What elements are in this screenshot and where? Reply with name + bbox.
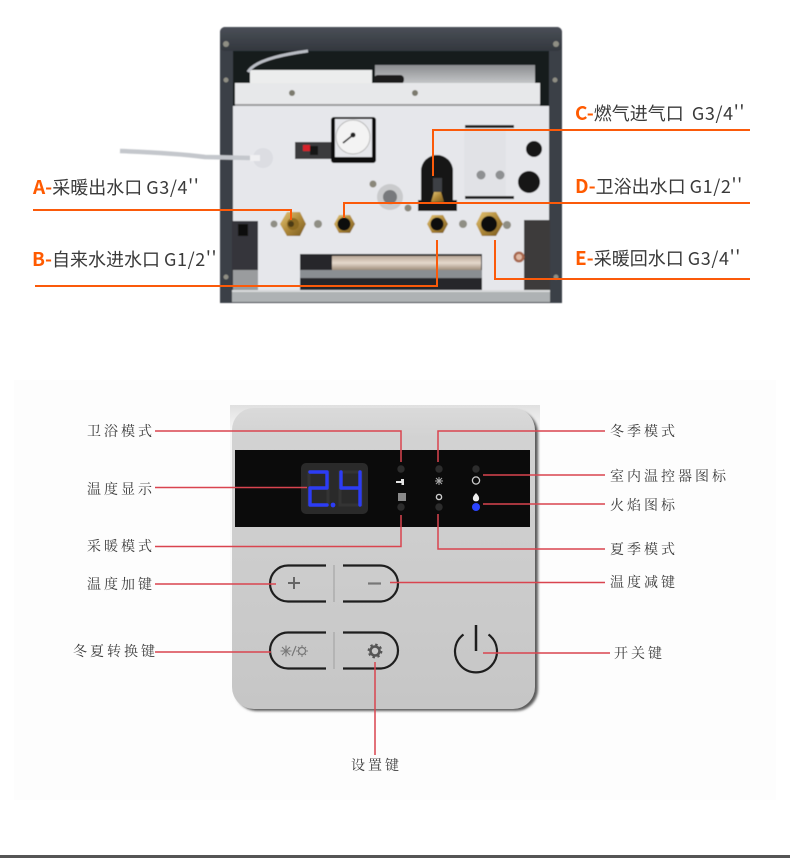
heat exchanger bbox=[265, 254, 482, 291]
icon: thermostat bbox=[472, 477, 480, 484]
label: bath mode bbox=[87, 423, 401, 462]
mounting bracket and holes bbox=[464, 125, 542, 199]
callout E: heating return bbox=[495, 240, 750, 279]
control panel bbox=[230, 405, 540, 715]
panel face bbox=[232, 408, 535, 709]
pressure gauge bbox=[331, 117, 376, 163]
label: settings bbox=[351, 662, 402, 774]
label: temp up: 温度加键 bbox=[87, 576, 155, 593]
plus button bbox=[270, 566, 326, 602]
panel background tint bbox=[14, 380, 776, 800]
panel backing bbox=[230, 405, 540, 715]
button dividers bbox=[333, 565, 335, 669]
label: bath mode: 卫浴模式 bbox=[87, 423, 155, 440]
icon: flame bbox=[473, 493, 479, 501]
power button bbox=[455, 625, 497, 672]
frame screws bbox=[223, 41, 559, 280]
fitting B bbox=[427, 215, 448, 233]
callout E: heating return: E-采暖回水口 G3/4'' bbox=[575, 244, 741, 271]
label: winter summer switch: 冬夏转换键 bbox=[73, 643, 158, 660]
label: summer mode bbox=[438, 514, 678, 558]
gas inlet recess bbox=[418, 155, 457, 211]
centre valve bbox=[370, 180, 412, 212]
temperature display bbox=[301, 463, 368, 514]
label: settings: 设置键 bbox=[351, 757, 402, 774]
callout B: cold water inlet: B-自来水进水口 G1/2'' bbox=[32, 245, 217, 272]
bottom rail bbox=[232, 290, 550, 302]
icon: snowflake bbox=[435, 477, 443, 485]
callout B: cold water inlet bbox=[32, 240, 437, 286]
icon: tap bbox=[396, 479, 404, 485]
label: temp down: 温度减键 bbox=[610, 574, 678, 591]
label: temperature display: 温度显示 bbox=[87, 481, 155, 498]
fitting D bbox=[334, 215, 355, 233]
footer bar bbox=[0, 855, 790, 858]
indicator LEDs bbox=[397, 465, 480, 511]
flame LED on bbox=[472, 503, 480, 511]
leader lines and labels bbox=[73, 423, 729, 774]
icon: radiator bbox=[398, 493, 406, 501]
boiler photo bbox=[120, 27, 562, 303]
callout C: gas inlet: C-燃气进气口 G3/4'' bbox=[575, 99, 745, 126]
callout D: bath outlet bbox=[344, 172, 750, 218]
power switch bbox=[295, 142, 331, 159]
left cutout bbox=[232, 221, 258, 290]
label: flame icon: 火焰图标 bbox=[610, 497, 678, 514]
label: winter mode: 冬季模式 bbox=[610, 423, 678, 440]
minus button bbox=[343, 566, 398, 602]
fitting E bbox=[476, 212, 503, 236]
label: winter mode bbox=[438, 423, 678, 462]
display band bbox=[235, 450, 530, 527]
settings button bbox=[343, 632, 398, 668]
fitting A bbox=[280, 212, 306, 236]
callout D: bath outlet: D-卫浴出水口 G1/2'' bbox=[575, 172, 743, 199]
icon: sun bbox=[436, 494, 442, 500]
right cutout with copper pipe bbox=[514, 220, 550, 290]
label: room thermostat icon: 室内温控器图标 bbox=[610, 468, 729, 485]
boiler frame bbox=[220, 27, 562, 303]
callout A: heating outlet bbox=[32, 173, 291, 220]
callout C: gas inlet bbox=[433, 99, 750, 176]
label: power: 开关键 bbox=[614, 645, 665, 662]
winter/summer button bbox=[270, 632, 326, 668]
boiler interior bbox=[233, 51, 549, 106]
callout A: heating outlet: A-采暖出水口 G3/4'' bbox=[32, 173, 199, 200]
power cable bbox=[120, 148, 273, 168]
label: summer mode: 夏季模式 bbox=[610, 541, 678, 558]
white mounting plate bbox=[233, 106, 549, 290]
label: heating mode bbox=[87, 515, 401, 555]
label: heating mode: 采暖模式 bbox=[87, 538, 155, 555]
